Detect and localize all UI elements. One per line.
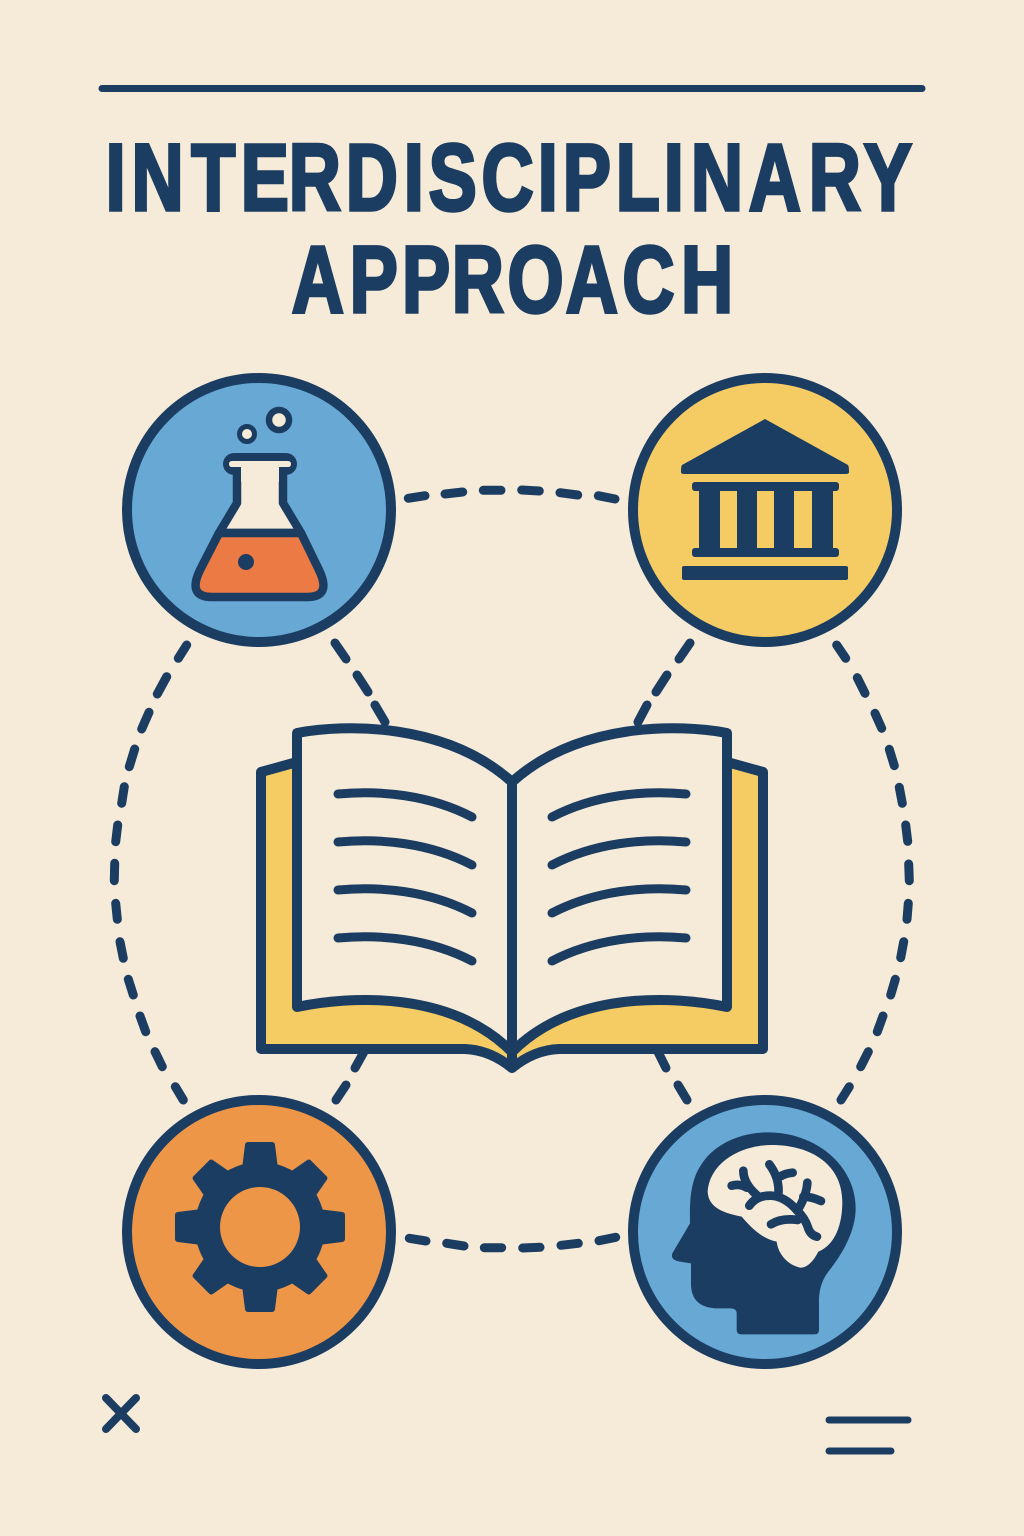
title line 2: APPROACH bbox=[292, 226, 733, 332]
icon: head with brain bbox=[672, 1132, 856, 1334]
humanities circle bbox=[633, 378, 897, 642]
engineering node: gear bbox=[127, 1100, 391, 1364]
bottom arc bbox=[409, 1237, 616, 1248]
psychology node: head and brain bbox=[633, 1100, 897, 1364]
top arc bbox=[408, 490, 615, 499]
dashed connectors bbox=[114, 490, 909, 1248]
inner connector bottom right bbox=[657, 1050, 687, 1100]
right page bbox=[512, 728, 727, 1052]
science circle bbox=[127, 378, 391, 642]
book spine bbox=[507, 782, 517, 1066]
title line 1: INTERDISCIPLINARY bbox=[106, 124, 912, 230]
book cover bbox=[261, 762, 763, 1068]
psychology circle bbox=[633, 1100, 897, 1364]
left page bbox=[297, 728, 512, 1052]
icon: classical building bbox=[681, 419, 849, 580]
inner connector top left bbox=[335, 643, 385, 722]
right page text lines bbox=[552, 793, 686, 961]
science node: flask bbox=[127, 378, 391, 642]
central open book bbox=[261, 728, 763, 1068]
outer left arc bbox=[114, 645, 187, 1100]
engineering circle bbox=[127, 1100, 391, 1364]
humanities node: temple bbox=[633, 378, 897, 642]
icon: flask bbox=[196, 410, 323, 597]
decorative mark: menu lines bbox=[829, 1420, 908, 1451]
inner connector top right bbox=[638, 643, 690, 722]
inner connector bottom left bbox=[336, 1050, 365, 1100]
icon: gear bbox=[178, 1145, 342, 1309]
left page text lines bbox=[338, 793, 472, 961]
outer right arc bbox=[837, 645, 909, 1100]
decorative mark: cross bbox=[106, 1398, 136, 1429]
title bbox=[106, 124, 912, 332]
